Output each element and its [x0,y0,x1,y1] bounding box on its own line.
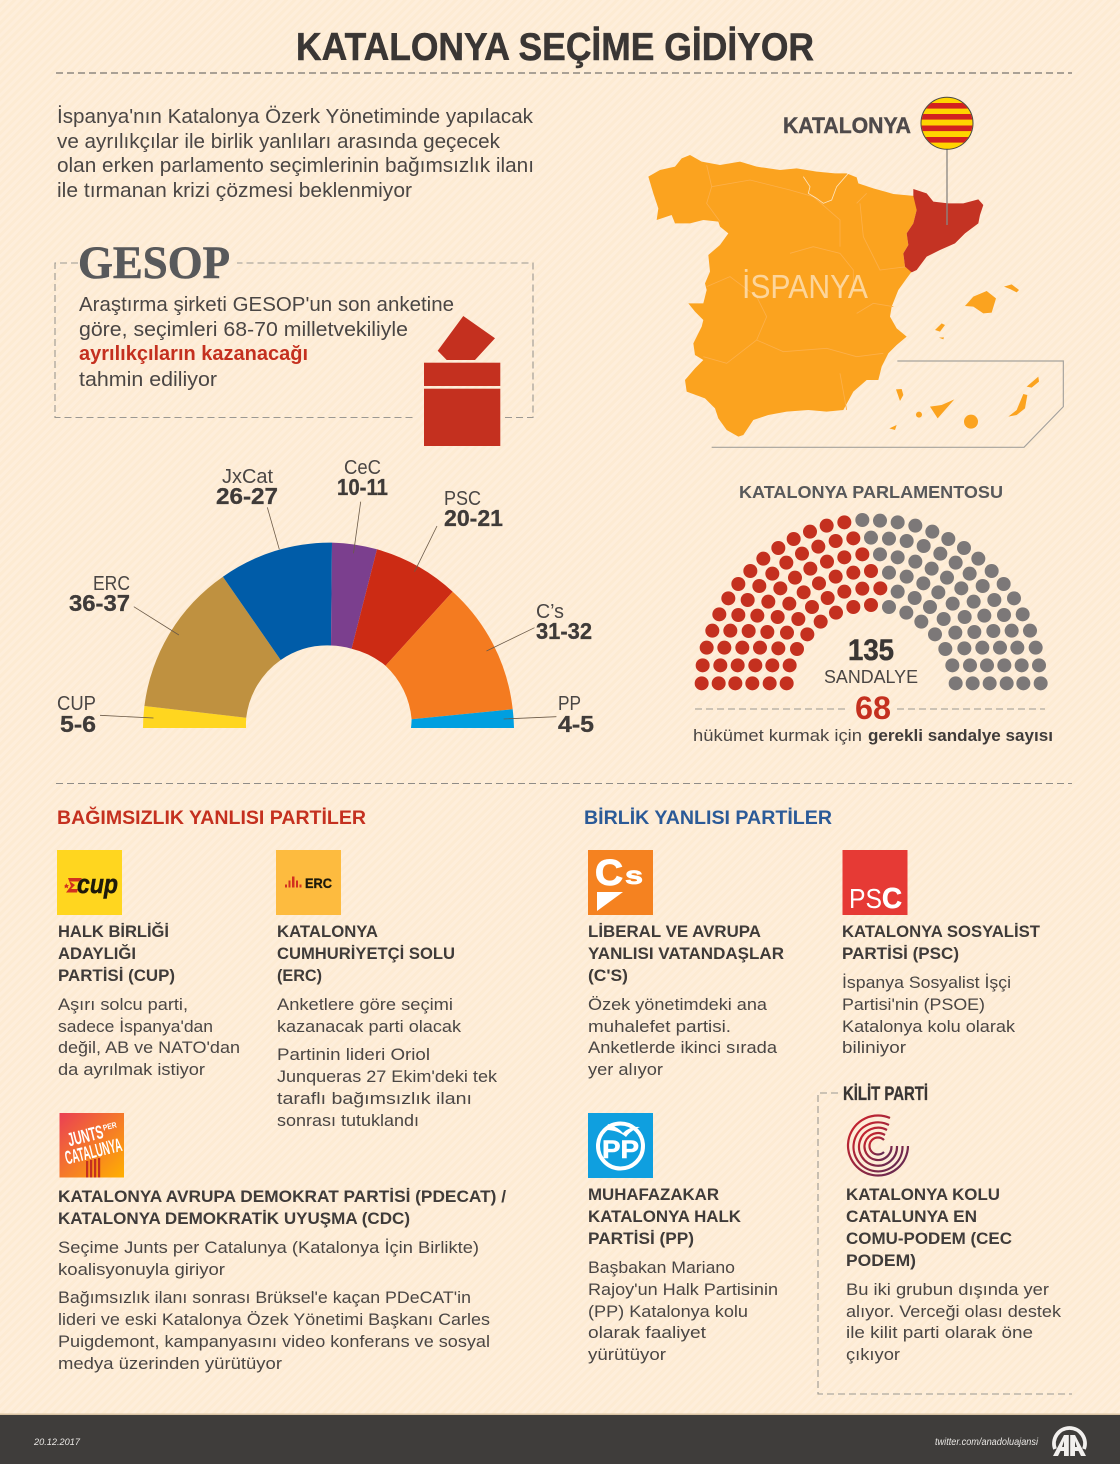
ERC text: Junqueras 27 Ekim'deki tek [277,1067,498,1086]
key party text: çıkıyor [846,1345,900,1364]
majority caption [693,726,1053,745]
pin line [945,149,949,225]
PP text: PARTİSİ (PP) [588,1230,694,1248]
icon: ERC logo: ERC [305,875,332,891]
label: CUP: 5-6 [60,711,96,737]
key party heading: KİLİT PARTİ [843,1084,928,1105]
PSC text: Katalonya kolu olarak [842,1017,1016,1036]
majority caption: gerekli sandalye sayısı [868,726,1053,745]
PDeCAT text: Bağımsızlık ilanı sonrası Brüksel'e kaçan PDeCAT'in [58,1288,471,1307]
footer [0,1414,1120,1464]
PDeCAT text: KATALONYA AVRUPA DEMOKRAT PARTİSİ (PDECAT) / [58,1188,506,1206]
PSC text [842,923,1040,1057]
GESOP text: göre, seçimleri 68-70 milletvekiliyle [79,318,408,341]
label: PSC: PSC [444,488,481,510]
panel: CUP [57,850,240,1079]
PSC text: Partisi'nin (PSOE) [842,995,985,1014]
CUP text: sadece İspanya'dan [58,1017,213,1036]
total seats [824,634,918,687]
PP text: MUHAFAZAKAR [588,1186,719,1204]
icon: Junts per Catalunya logo [59,1113,124,1178]
label: ERC [69,573,130,616]
date: 20.12.2017 [33,1437,81,1448]
panel: PP [588,1113,778,1364]
heading: pro-independence parties: BAĞIMSIZLIK YANLISI PARTİLER [57,807,366,829]
icon: PSC logo: C [882,883,902,915]
label: PSC [444,488,503,531]
icon: CUP logo: cup [77,869,118,899]
total seats: SANDALYE [824,667,918,687]
GESOP heading: GESOP [78,237,230,289]
key party text: ile kilit parti olarak öne [846,1323,1033,1342]
separatist seats [695,515,887,690]
mainland Spain [648,155,917,437]
PDeCAT text: koalisyonuyla giriyor [58,1260,225,1279]
GESOP text: Araştırma şirketi GESOP'un son anketine [79,293,454,316]
leader lines [100,502,556,719]
Cs text: muhalefet partisi. [588,1017,731,1036]
label: ERC: ERC [93,573,130,595]
icon: PP logo [588,1113,653,1178]
Ispanya label: İSPANYA [742,268,868,305]
PSC text: KATALONYA SOSYALİST [842,923,1040,941]
GESOP text: tahmin ediliyor [79,368,217,391]
icon: Anadolu Agency logo [1053,1428,1086,1456]
icon: Catalonia flag pin [920,97,974,149]
ERC text: kazanacak parti olacak [277,1017,462,1036]
GESOP text: ayrılıkçıların kazanacağı [79,342,308,365]
icon: Junts per Catalunya logo: CATALUNYA [63,1135,124,1169]
Cs text: YANLISI VATANDAŞLAR [588,945,784,963]
PDeCAT text: Puigdemont, kampanyasını video konferans ve sosyal [58,1332,490,1351]
label: ERC: 36-37 [69,590,130,616]
key party text: KATALONYA KOLU [846,1186,1000,1204]
ERC text: Anketlere göre seçimi [277,995,453,1014]
title: KATALONYA SEÇİME GİDİYOR [296,26,814,69]
ERC text: CUMHURİYETÇİ SOLU [277,945,455,963]
PP text: yürütüyor [588,1345,666,1364]
label: CUP: CUP [57,693,96,715]
PSC text: biliniyor [842,1038,906,1057]
label: PSC: 20-21 [444,505,503,531]
GESOP text [79,293,454,391]
label: CeC: 10-11 [337,474,388,500]
label: PP [558,693,594,737]
CUP text: Aşırı solcu parti, [58,995,188,1014]
icon: PP logo: PP [602,1136,639,1164]
ERC text [277,923,498,1130]
CUP text: HALK BİRLİĞİ [58,922,169,941]
Cs text: (C'S) [588,967,628,985]
CUP text: da ayrılmak istiyor [58,1060,205,1079]
panel: GESOP survey [55,237,533,446]
PDeCAT text [58,1188,506,1373]
PP text: Rajoy'un Halk Partisinin [588,1280,778,1299]
PSC text: İspanya Sosyalist İşçi [842,973,1011,992]
total seats: 135 [848,634,894,667]
Cs text: Özek yönetimdeki ana [588,995,768,1014]
intro text: ile tırmanan krizi çözmesi beklenmiyor [57,179,412,202]
panel: Cs [588,850,784,1079]
intro text: ve ayrılıkçılar ile birlik yanlıları arasında geçecek [57,130,501,153]
CUP text: değil, AB ve NATO'dan [58,1038,240,1057]
label: CUP [57,693,96,737]
Katalonya label: KATALONYA [783,113,911,138]
label: Cs [536,601,592,644]
key party text: Bu iki grubun dışında yer [846,1280,1049,1299]
intro text: olan erken parlamento seçimlerinin bağımsızlık ilanı [57,154,534,177]
chart: seat dots [695,513,1048,690]
PDeCAT text: KATALONYA DEMOKRATİK UYUŞMA (CDC) [58,1210,410,1228]
PDeCAT text: lideri ve eski Katalonya Özek Yönetimi Başkanı Carles [58,1310,490,1329]
icon: CUP logo [57,850,122,915]
label: JxCat [216,466,278,509]
PP text: (PP) Katalonya kolu [588,1302,748,1321]
label: Cs: 31-32 [536,618,592,644]
key party text: PODEM) [846,1252,916,1270]
panel: PDeCAT / CDC [58,1113,506,1373]
ERC text: (ERC) [277,967,322,985]
panel: PSC [842,850,1040,1057]
icon: Junts per Catalunya logo: JUNTS [66,1122,106,1151]
label: CeC [337,457,388,500]
CUP text [58,922,240,1079]
icon: PSC logo [842,850,908,915]
CUP text: PARTİSİ (CUP) [58,967,175,985]
PP text [588,1186,778,1364]
key party text: COMU-PODEM (CEC [846,1230,1012,1248]
icon: Junts per Catalunya logo: PER [102,1120,118,1133]
label: PP: PP [558,693,581,715]
PP text: KATALONYA HALK [588,1208,741,1226]
label: JxCat: 26-27 [216,483,278,509]
twitter address: twitter.com/anadoluajansi [935,1437,1039,1448]
majority number: 68 [855,690,891,726]
CUP text: ADAYLIĞI [58,944,136,963]
ERC text: sonrası tutuklandı [277,1111,419,1130]
Cs text: LİBERAL VE AVRUPA [588,923,761,941]
PP text: Başbakan Mariano [588,1258,735,1277]
Cs text [588,923,784,1079]
PDeCAT text: Seçime Junts per Catalunya (Katalonya İçin Birlikte) [58,1238,479,1257]
Cs text: yer alıyor [588,1060,663,1079]
inset frame [712,361,1063,447]
ERC text: Partinin lideri Oriol [277,1045,430,1064]
icon: Ciudadanos logo [588,850,653,915]
majority caption: hükümet kurmak için [693,726,862,745]
key party text: CATALUNYA EN [846,1208,977,1226]
map of Spain [648,149,1063,447]
PDeCAT text: medya üzerinden yürütüyor [58,1354,282,1373]
label: Cs: C’s [536,601,564,623]
panel: ERC [276,850,498,1130]
intro text [57,105,534,202]
Cs text: Anketlerde ikinci sırada [588,1038,778,1057]
key party text [846,1186,1062,1364]
islands [889,284,1039,430]
key party text: alıyor. Verceği olası destek [846,1302,1062,1321]
icon: ballot box [424,316,500,446]
ERC text: taraflı bağımsızlık ilanı [277,1089,472,1108]
icon: Catalunya en Comu-Podem logo [848,1115,908,1175]
icon: PSC logo: PS [849,883,882,914]
icon: ERC logo [276,850,341,915]
panel: Catalonia parliament [693,482,1053,745]
label: PP: 4-5 [558,711,594,737]
panel: key party [818,1084,1072,1394]
parliament heading: KATALONYA PARLAMENTOSU [739,482,1003,502]
label: CeC: CeC [344,457,381,479]
label: JxCat: JxCat [222,466,273,488]
icon: Ciudadanos logo: C [595,852,623,893]
intro text: İspanya'nın Katalonya Özerk Yönetiminde yapılacak [57,105,534,128]
ERC text: KATALONYA [277,923,378,941]
PSC text: PARTİSİ (PSC) [842,945,959,963]
heading: pro-union parties: BİRLİK YANLISI PARTİLER [584,808,832,829]
Catalonia highlighted [903,189,983,272]
PP text: olarak faaliyet [588,1323,706,1342]
chart: survey hemicycle [57,457,594,737]
icon: Ciudadanos logo: s [625,862,643,890]
other seats [855,513,1048,690]
